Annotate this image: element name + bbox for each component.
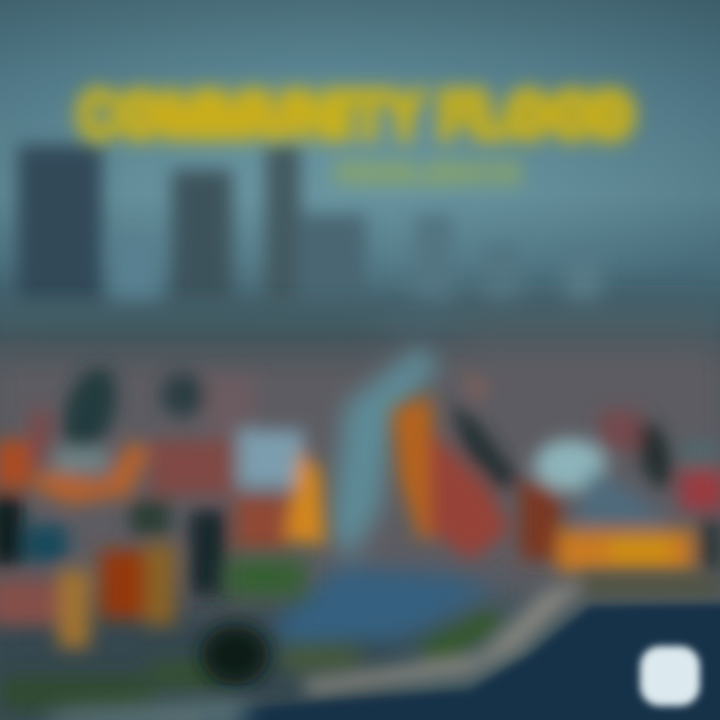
dark tree [201, 625, 269, 685]
title: COMMUNITY FLOOD [78, 78, 634, 151]
skyline towers [0, 145, 720, 334]
white corner badge [640, 646, 700, 706]
dark water foreground [200, 604, 720, 720]
houses right [392, 370, 720, 572]
green strip and path right [300, 575, 720, 695]
green strips left [0, 560, 360, 706]
subtitle: RESILIENCE [335, 157, 521, 190]
neighbourhood ground [0, 320, 720, 720]
flooded central canal [270, 345, 500, 650]
houses left [0, 361, 325, 648]
